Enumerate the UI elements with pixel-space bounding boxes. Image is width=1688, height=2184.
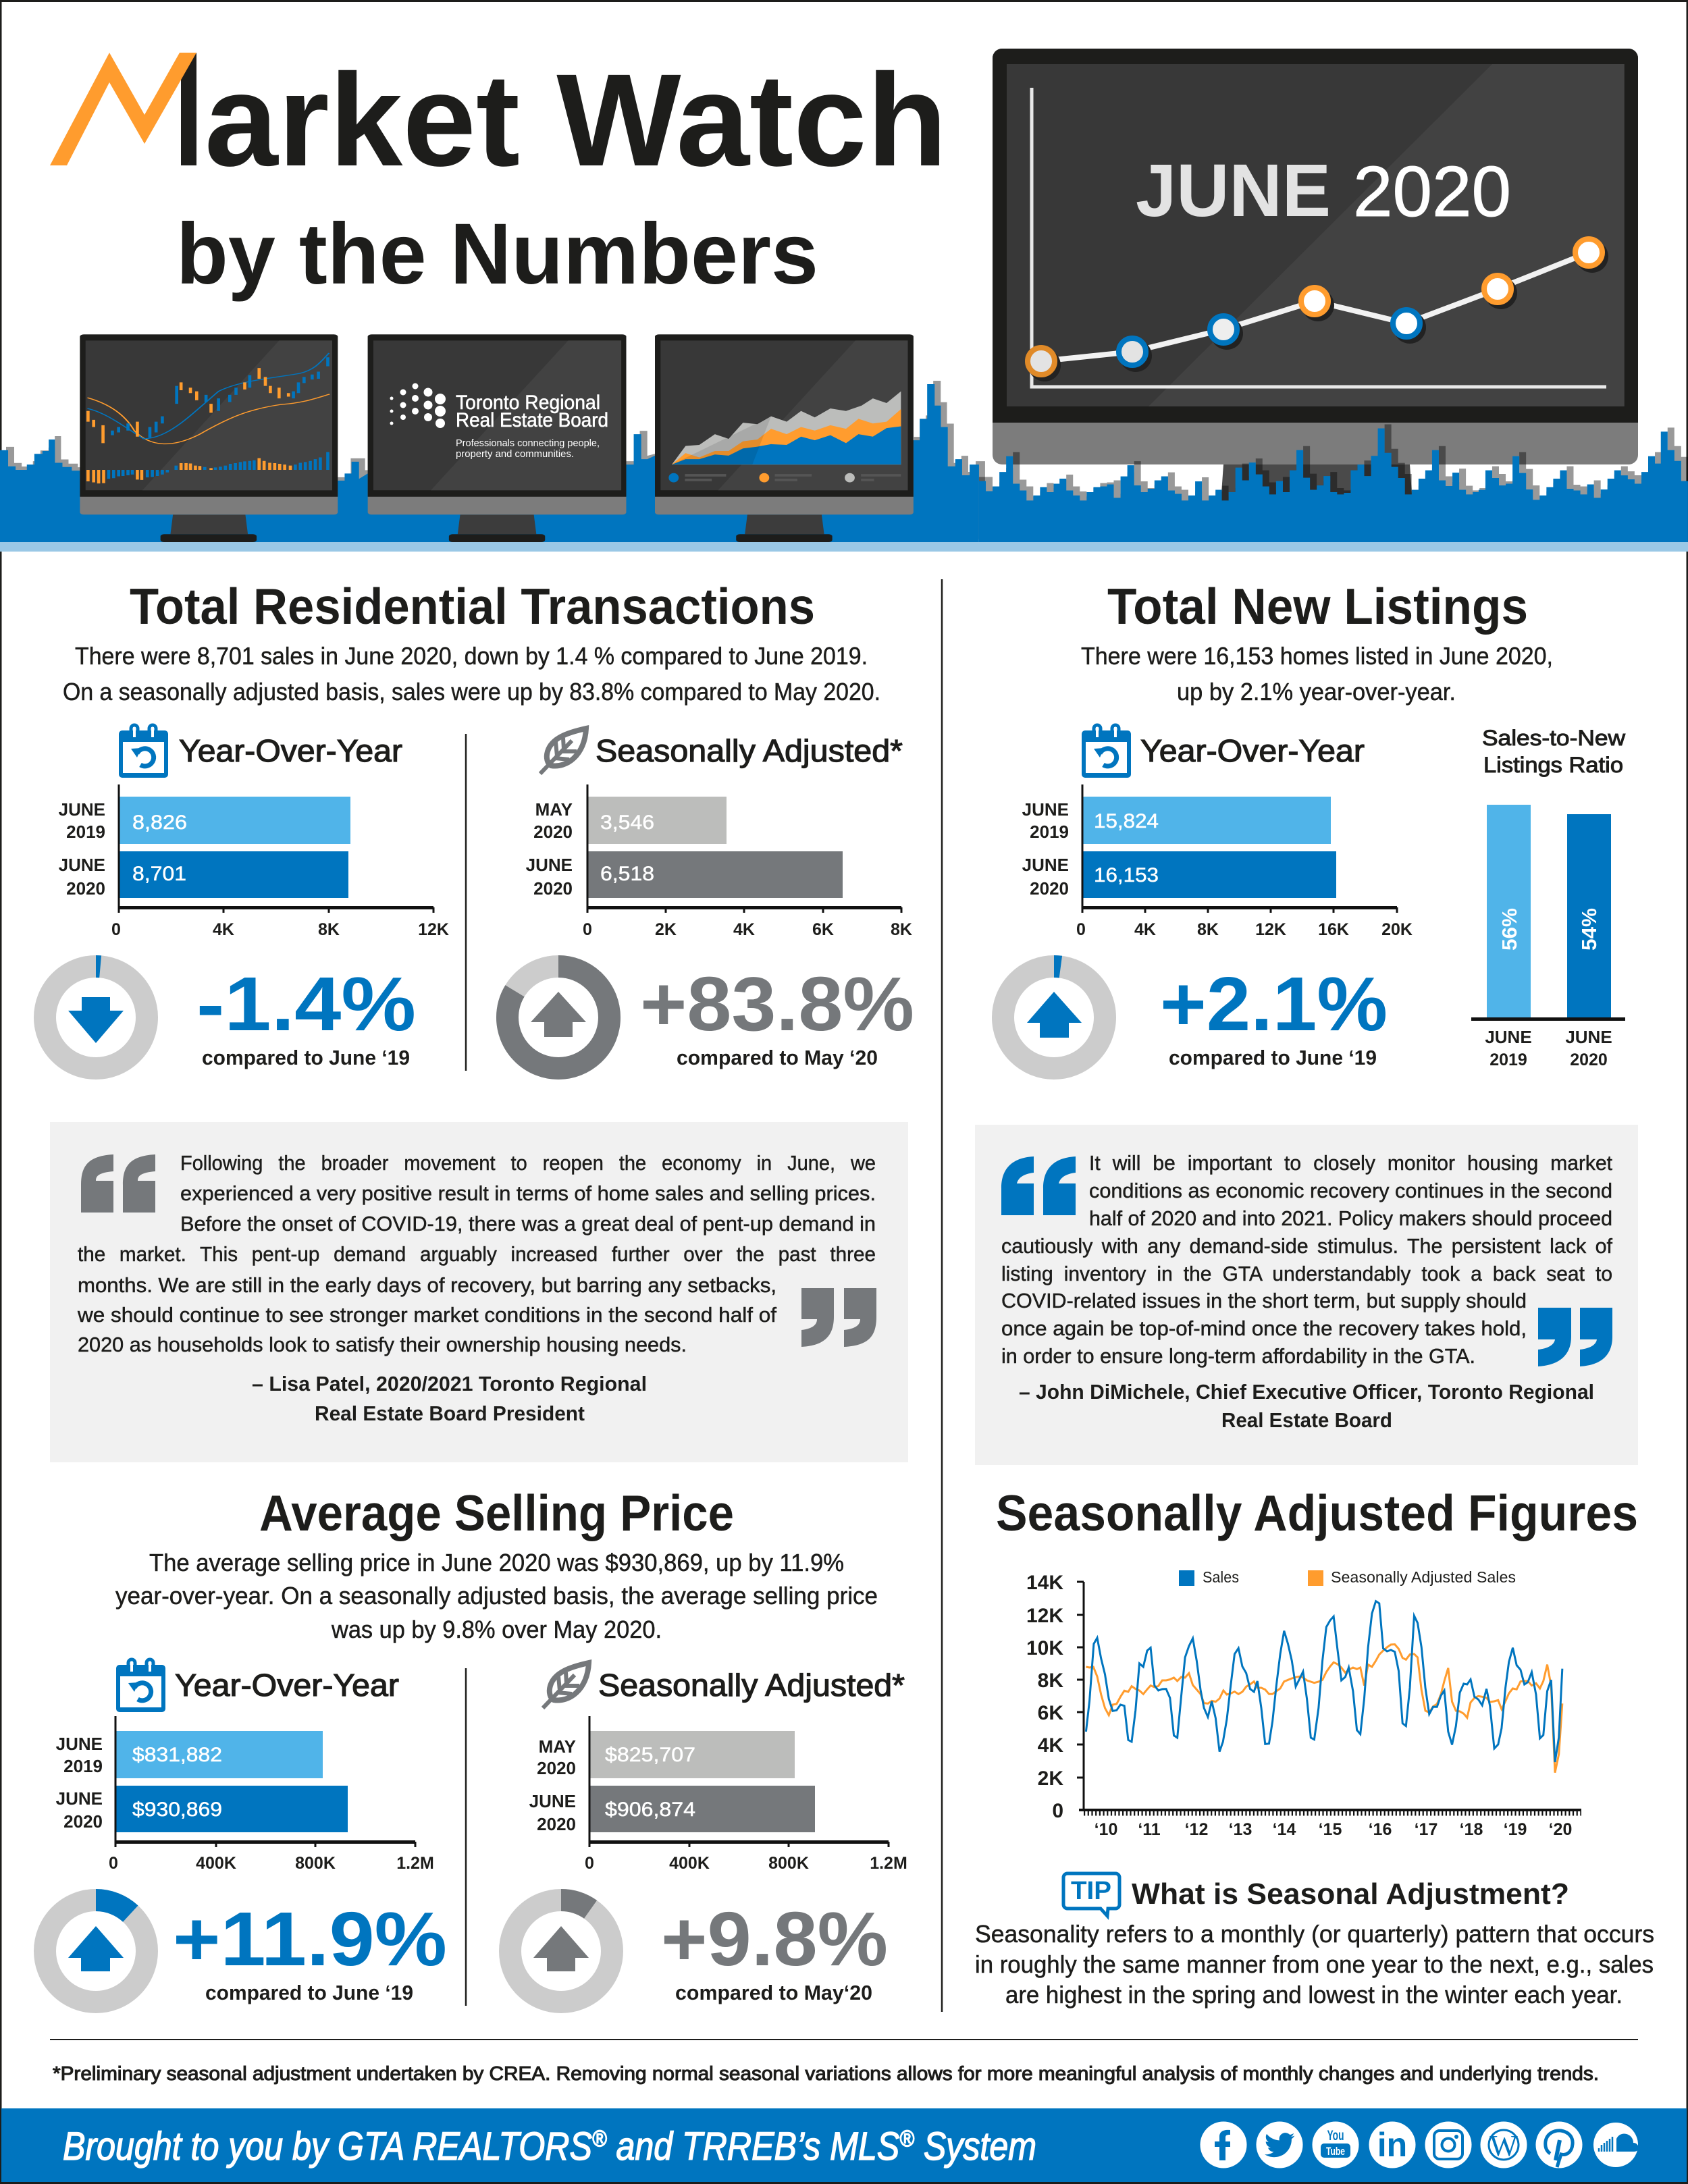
- bar chart: price seasonally adjusted: 0: [585, 1854, 594, 1873]
- line chart: sales vs seasonally adjusted: ‘19: [1504, 1820, 1527, 1839]
- summary text: [63, 642, 880, 705]
- bar chart: price YoY: JUNE: [56, 1734, 103, 1754]
- bar chart: price seasonally adjusted: MAY: [539, 1736, 576, 1757]
- icon: WordPress: W: [1489, 2129, 1518, 2162]
- stat: +83.8%: +83.8%: [640, 961, 914, 1046]
- line chart: sales vs seasonally adjusted: 4K: [1038, 1734, 1063, 1757]
- legend: Seasonally Adjusted Sales: [1331, 1568, 1516, 1586]
- bar chart: price YoY: $930,869: [132, 1799, 222, 1821]
- chart: sales-to-new listings ratio: [1471, 726, 1626, 1069]
- panel: quote Lisa Patel: [50, 1122, 908, 1462]
- icon: TIP badge: TIP: [1071, 1877, 1111, 1905]
- small monitor: area chart: [655, 334, 914, 542]
- icon: Facebook: [1201, 2121, 1246, 2168]
- bar chart: listings YoY: JUNE: [1022, 799, 1069, 820]
- bar chart: sales seasonally adjusted: 2K: [655, 920, 677, 939]
- bar chart: sales seasonally adjusted: 4K: [733, 920, 755, 939]
- line chart: sales vs seasonally adjusted: ‘15: [1319, 1820, 1342, 1839]
- quote text: months. We are still in the early days of recovery, but barring any setbacks,: [78, 1273, 776, 1297]
- footer text: ®: [592, 2126, 607, 2152]
- bar chart: sales seasonally adjusted: 8K: [891, 920, 912, 939]
- icon: opening quote: [1001, 1156, 1076, 1215]
- quote text: It will be important to closely monitor housing market: [1089, 1151, 1612, 1175]
- footer bar: [1, 2108, 1687, 2182]
- panel: quote John DiMichele: [975, 1125, 1638, 1465]
- stat: -1.4%: compared to June ‘19: [202, 1046, 410, 1069]
- bar chart: price YoY: 400K: [196, 1854, 236, 1873]
- bar chart: sales seasonally adjusted: 2020: [533, 878, 573, 899]
- quote text: in order to ensure long-term affordability in the GTA.: [1001, 1344, 1475, 1368]
- quote text: half of 2020 and into 2021. Policy makers should proceed: [1089, 1206, 1612, 1230]
- icon: Instagram: [1425, 2121, 1472, 2168]
- donut: +2.1%: [1003, 967, 1105, 1068]
- chart line with markers: [1028, 239, 1608, 381]
- bar chart: listings YoY: [1022, 784, 1413, 939]
- icon: YouTube: You: [1327, 2128, 1344, 2143]
- stat: +11.9%: +11.9%: [173, 1896, 447, 1981]
- year-over-year header: Year-Over-Year: [175, 1668, 399, 1703]
- bar chart: price seasonally adjusted: JUNE: [529, 1791, 576, 1811]
- summary text: year-over-year. On a seasonally adjusted basis, the average selling price: [115, 1582, 878, 1609]
- donut: +11.9%: [45, 1900, 147, 2002]
- bar chart: listings YoY: 12K: [1255, 920, 1286, 939]
- stat: +11.9%: compared to June ‘19: [205, 1981, 413, 2004]
- line chart: sales vs seasonally adjusted: ‘10: [1094, 1820, 1117, 1839]
- stat: +9.8%: compared to May‘20: [675, 1981, 872, 2004]
- bar chart: price YoY: [56, 1716, 434, 1873]
- summary text: The average selling price in June 2020 was $930,869, up by 11.9%: [149, 1549, 844, 1576]
- bar chart: price seasonally adjusted: $825,707: [605, 1744, 695, 1766]
- quote text: experienced a very positive result in terms of home sales and selling prices.: [180, 1181, 876, 1205]
- bar chart: listings YoY: 4K: [1134, 920, 1156, 939]
- bar chart: price YoY: $831,882: [132, 1744, 222, 1766]
- seasonally adjusted header: Seasonally Adjusted*: [596, 733, 903, 768]
- icon: LinkedIn: [1369, 2121, 1415, 2168]
- bar chart: sales seasonally adjusted: JUNE: [526, 855, 573, 875]
- icon: YouTube: [1313, 2121, 1359, 2168]
- bar chart: sales seasonally adjusted: 2020: [533, 822, 573, 842]
- footer text: Brought to you by GTA REALTORS: [63, 2125, 675, 2168]
- bar chart: listings YoY: 16,153: [1094, 864, 1159, 886]
- year-over-year header: [116, 1659, 399, 1712]
- date heading: [1136, 149, 1511, 232]
- icon: closing quote: [1538, 1308, 1612, 1366]
- legend: Sales: [1203, 1568, 1239, 1586]
- bar chart: price seasonally adjusted: $906,874: [605, 1799, 695, 1821]
- bar chart: price YoY: 1.2M: [396, 1854, 434, 1873]
- quote text: 2020 as households look to satisfy their ownership housing needs.: [78, 1333, 687, 1356]
- quote text: we should continue to see stronger market conditions in the second half of: [77, 1303, 776, 1327]
- chart: sales-to-new listings ratio: Sales-to-New: [1482, 726, 1626, 750]
- bar chart: price seasonally adjusted: 2020: [537, 1814, 576, 1834]
- icon: opening quote: [81, 1154, 155, 1213]
- line chart: sales vs seasonally adjusted: ‘13: [1229, 1820, 1252, 1839]
- bar chart: sales YoY: 12K: [418, 920, 449, 939]
- small monitor: Toronto Regional Real Estate Board logo: property and communities.: [456, 448, 574, 460]
- tip text: in roughly the same manner from one year to the next, e.g., sales: [975, 1950, 1654, 1978]
- bar chart: price YoY: 800K: [295, 1854, 336, 1873]
- bar chart: sales YoY: JUNE: [59, 855, 105, 875]
- quote text: conditions as economic recovery continues in the second: [1089, 1179, 1612, 1202]
- bar chart: sales YoY: JUNE: [59, 799, 105, 820]
- bar chart: sales YoY: 2019: [66, 822, 105, 842]
- line chart: sales vs seasonally adjusted: 14K: [1026, 1572, 1063, 1594]
- quote text: the market. This pent-up demand arguably increased further over the past three: [78, 1242, 876, 1266]
- attribution: – John DiMichele, Chief Executive Officer, Toronto Regional: [1019, 1380, 1594, 1404]
- bar chart: price YoY: JUNE: [56, 1788, 103, 1809]
- chart: sales-to-new listings ratio: 2019: [1489, 1050, 1527, 1069]
- bar chart: price seasonally adjusted: 800K: [768, 1854, 809, 1873]
- attribution: [252, 1372, 647, 1425]
- bar chart: listings YoY: 0: [1076, 920, 1086, 939]
- bar chart: sales seasonally adjusted: 6,518: [600, 863, 654, 885]
- bar chart: listings YoY: JUNE: [1022, 855, 1069, 875]
- chart: sales-to-new listings ratio: 56%: [1498, 908, 1521, 951]
- date heading: JUNE: [1136, 149, 1331, 232]
- line chart: sales vs seasonally adjusted: ‘16: [1369, 1820, 1392, 1839]
- bar chart: sales seasonally adjusted: MAY: [535, 799, 573, 820]
- panel: Total Residential Transactions: [45, 578, 914, 1069]
- summary text: was up by 9.8% over May 2020.: [331, 1616, 662, 1643]
- bar chart: price seasonally adjusted: 1.2M: [870, 1854, 907, 1873]
- date heading: 2020: [1353, 152, 1511, 232]
- quote text: Following the broader movement to reopen the economy in June, we: [180, 1151, 876, 1175]
- line chart: sales vs seasonally adjusted: ‘18: [1460, 1820, 1483, 1839]
- line chart: sales vs seasonally adjusted: 8K: [1038, 1670, 1063, 1692]
- footnote: *Preliminary seasonal adjustment undertaken by CREA. Removing normal seasonal variations allows for more meaningful analysis of monthly changes and underlying trends.: [53, 2063, 1599, 2085]
- quote text: [77, 1151, 876, 1356]
- summary text: [115, 1549, 878, 1643]
- panel: Total New Listings: [1003, 578, 1626, 1069]
- line chart: sales vs seasonally adjusted: ‘12: [1185, 1820, 1208, 1839]
- bar chart: price YoY: 2019: [63, 1756, 103, 1776]
- bar chart: price seasonally adjusted: [529, 1716, 907, 1873]
- title: Market Watch by the Numbers: arket Watch: [205, 47, 947, 194]
- line chart: sales vs seasonally adjusted: [1026, 1572, 1581, 1839]
- summary text: [1081, 642, 1553, 705]
- stat: +9.8%: +9.8%: [661, 1896, 888, 1981]
- seasonally adjusted header: [543, 1663, 905, 1708]
- bar chart: sales YoY: [59, 784, 449, 939]
- bar chart: listings YoY: 2019: [1030, 822, 1069, 842]
- footer text: and TRREB’s MLS: [607, 2125, 900, 2168]
- attribution: [1019, 1380, 1594, 1432]
- heading: Total Residential Transactions: [130, 578, 815, 635]
- donut: -1.4%: [45, 967, 147, 1068]
- bar chart: sales YoY: 8K: [318, 920, 340, 939]
- chart: sales-to-new listings ratio: JUNE: [1565, 1027, 1612, 1047]
- panel: Seasonally Adjusted Figures: [975, 1485, 1654, 2008]
- bar chart: sales YoY: 8,701: [132, 863, 186, 885]
- footer text: ®: [899, 2126, 915, 2152]
- bar chart: price seasonally adjusted: 400K: [669, 1854, 710, 1873]
- chart: sales-to-new listings ratio: JUNE: [1485, 1027, 1532, 1047]
- bar chart: sales seasonally adjusted: [526, 784, 912, 939]
- section dividers: [466, 579, 942, 2012]
- summary text: There were 16,153 homes listed in June 2020,: [1081, 642, 1553, 670]
- bar chart: listings YoY: 16K: [1318, 920, 1349, 939]
- summary text: up by 2.1% year-over-year.: [1177, 678, 1456, 705]
- icon: Twitter: [1256, 2121, 1303, 2168]
- line chart: sales vs seasonally adjusted: ‘17: [1415, 1820, 1438, 1839]
- tip text: [975, 1920, 1654, 2008]
- bar chart: sales seasonally adjusted: 3,546: [600, 811, 654, 834]
- legend: [1179, 1568, 1516, 1586]
- small monitor: Toronto Regional Real Estate Board logo: Real Estate Board: [456, 409, 608, 431]
- quote text: cautiously with any demand-side stimulus. The persistent lack of: [1001, 1234, 1612, 1258]
- title: Market Watch by the Numbers: by the Numbers: [176, 206, 818, 302]
- year-over-year header: Year-Over-Year: [179, 733, 402, 768]
- line chart: sales vs seasonally adjusted: ‘11: [1138, 1820, 1161, 1839]
- icon: WordPress: [1480, 2121, 1527, 2168]
- heading: Total New Listings: [1107, 578, 1528, 635]
- tip text: Seasonality refers to a monthly (or quarterly) pattern that occurs: [975, 1920, 1654, 1948]
- summary text: There were 8,701 sales in June 2020, down by 1.4 % compared to June 2019.: [75, 642, 868, 670]
- stat: +2.1%: compared to June ‘19: [1169, 1046, 1377, 1069]
- line chart: sales vs seasonally adjusted: 12K: [1026, 1605, 1063, 1627]
- bar chart: sales seasonally adjusted: 6K: [812, 920, 834, 939]
- quote text: [1001, 1151, 1612, 1368]
- quote text: Before the onset of COVID-19, there was a great deal of pent-up demand in: [180, 1212, 876, 1235]
- line chart: sales vs seasonally adjusted: 2K: [1038, 1767, 1063, 1790]
- heading: Seasonally Adjusted Figures: [996, 1485, 1638, 1541]
- icon: LinkedIn: in: [1377, 2126, 1407, 2164]
- icon: SoundCloud: [1593, 2123, 1639, 2167]
- attribution: – Lisa Patel, 2020/2021 Toronto Regional: [252, 1372, 647, 1395]
- small monitor: Toronto Regional Real Estate Board logo: Toronto Regional: [456, 392, 600, 414]
- chart: sales-to-new listings ratio: Listings Ratio: [1483, 753, 1623, 777]
- donut: +9.8%: [510, 1900, 612, 2002]
- line chart: sales vs seasonally adjusted: ‘14: [1273, 1820, 1296, 1839]
- title: Market Watch by the Numbers: [50, 47, 947, 302]
- quote text: COVID-related issues in the short term, but supply should: [1001, 1289, 1527, 1312]
- stat: +83.8%: compared to May ‘20: [677, 1046, 878, 1069]
- donut: +83.8%: [508, 967, 609, 1068]
- small monitor: Toronto Regional Real Estate Board logo: Professionals connecting people,: [456, 437, 600, 449]
- bar chart: sales YoY: 0: [111, 920, 121, 939]
- line chart: sales vs seasonally adjusted: 10K: [1026, 1637, 1063, 1659]
- year-over-year header: [1082, 725, 1365, 778]
- line chart: sales vs seasonally adjusted: 0: [1052, 1800, 1063, 1822]
- bar chart: listings YoY: 15,824: [1094, 810, 1159, 832]
- bar chart: sales YoY: 8,826: [132, 811, 187, 834]
- bar chart: price seasonally adjusted: 2020: [537, 1758, 576, 1778]
- icon: TIP badge: [1063, 1873, 1119, 1916]
- tip heading: What is Seasonal Adjustment?: [1132, 1877, 1569, 1911]
- attribution: Real Estate Board: [1221, 1408, 1392, 1432]
- bar chart: price YoY: 0: [109, 1854, 118, 1873]
- year-over-year header: Year-Over-Year: [1140, 733, 1365, 768]
- heading: Average Selling Price: [259, 1485, 734, 1541]
- bar chart: listings YoY: 2020: [1030, 878, 1069, 899]
- attribution: Real Estate Board President: [315, 1402, 585, 1425]
- bar chart: listings YoY: 8K: [1197, 920, 1219, 939]
- bar chart: price YoY: 2020: [63, 1811, 103, 1832]
- stat: -1.4%: -1.4%: [196, 961, 416, 1046]
- icon: closing quote: [801, 1288, 876, 1347]
- line chart: sales vs seasonally adjusted: 6K: [1038, 1702, 1063, 1724]
- bar chart: sales YoY: 2020: [66, 878, 105, 899]
- quote text: once again be top-of-mind once the recovery takes hold,: [1001, 1316, 1527, 1340]
- large monitor: June 2020 chart: [993, 49, 1638, 503]
- small monitor: candlestick chart: [80, 334, 338, 542]
- line chart: sales vs seasonally adjusted: ‘20: [1549, 1820, 1572, 1839]
- chart: sales-to-new listings ratio: 54%: [1577, 908, 1601, 951]
- panel: Average Selling Price: [45, 1485, 907, 2004]
- summary text: On a seasonally adjusted basis, sales were up by 83.8% compared to May 2020.: [63, 678, 880, 705]
- bar chart: listings YoY: 20K: [1381, 920, 1413, 939]
- stat: +2.1%: +2.1%: [1160, 961, 1388, 1046]
- footer text: System: [914, 2125, 1036, 2168]
- seasonally adjusted header: [540, 728, 903, 774]
- year-over-year header: [119, 725, 402, 778]
- bar chart: sales seasonally adjusted: 0: [583, 920, 592, 939]
- tip text: are highest in the spring and lowest in the winter each year.: [1005, 1981, 1623, 2008]
- icon: Pinterest: [1535, 2121, 1583, 2168]
- seasonally adjusted header: Seasonally Adjusted*: [598, 1668, 905, 1703]
- bar chart: sales YoY: 4K: [213, 920, 234, 939]
- small monitor: Toronto Regional Real Estate Board logo: [368, 334, 626, 542]
- icon: YouTube: Tube: [1326, 2145, 1345, 2158]
- quote text: listing inventory in the GTA understandably took a back seat to: [1001, 1262, 1612, 1285]
- skyline band: [0, 381, 1688, 552]
- chart: sales-to-new listings ratio: 2020: [1570, 1050, 1608, 1069]
